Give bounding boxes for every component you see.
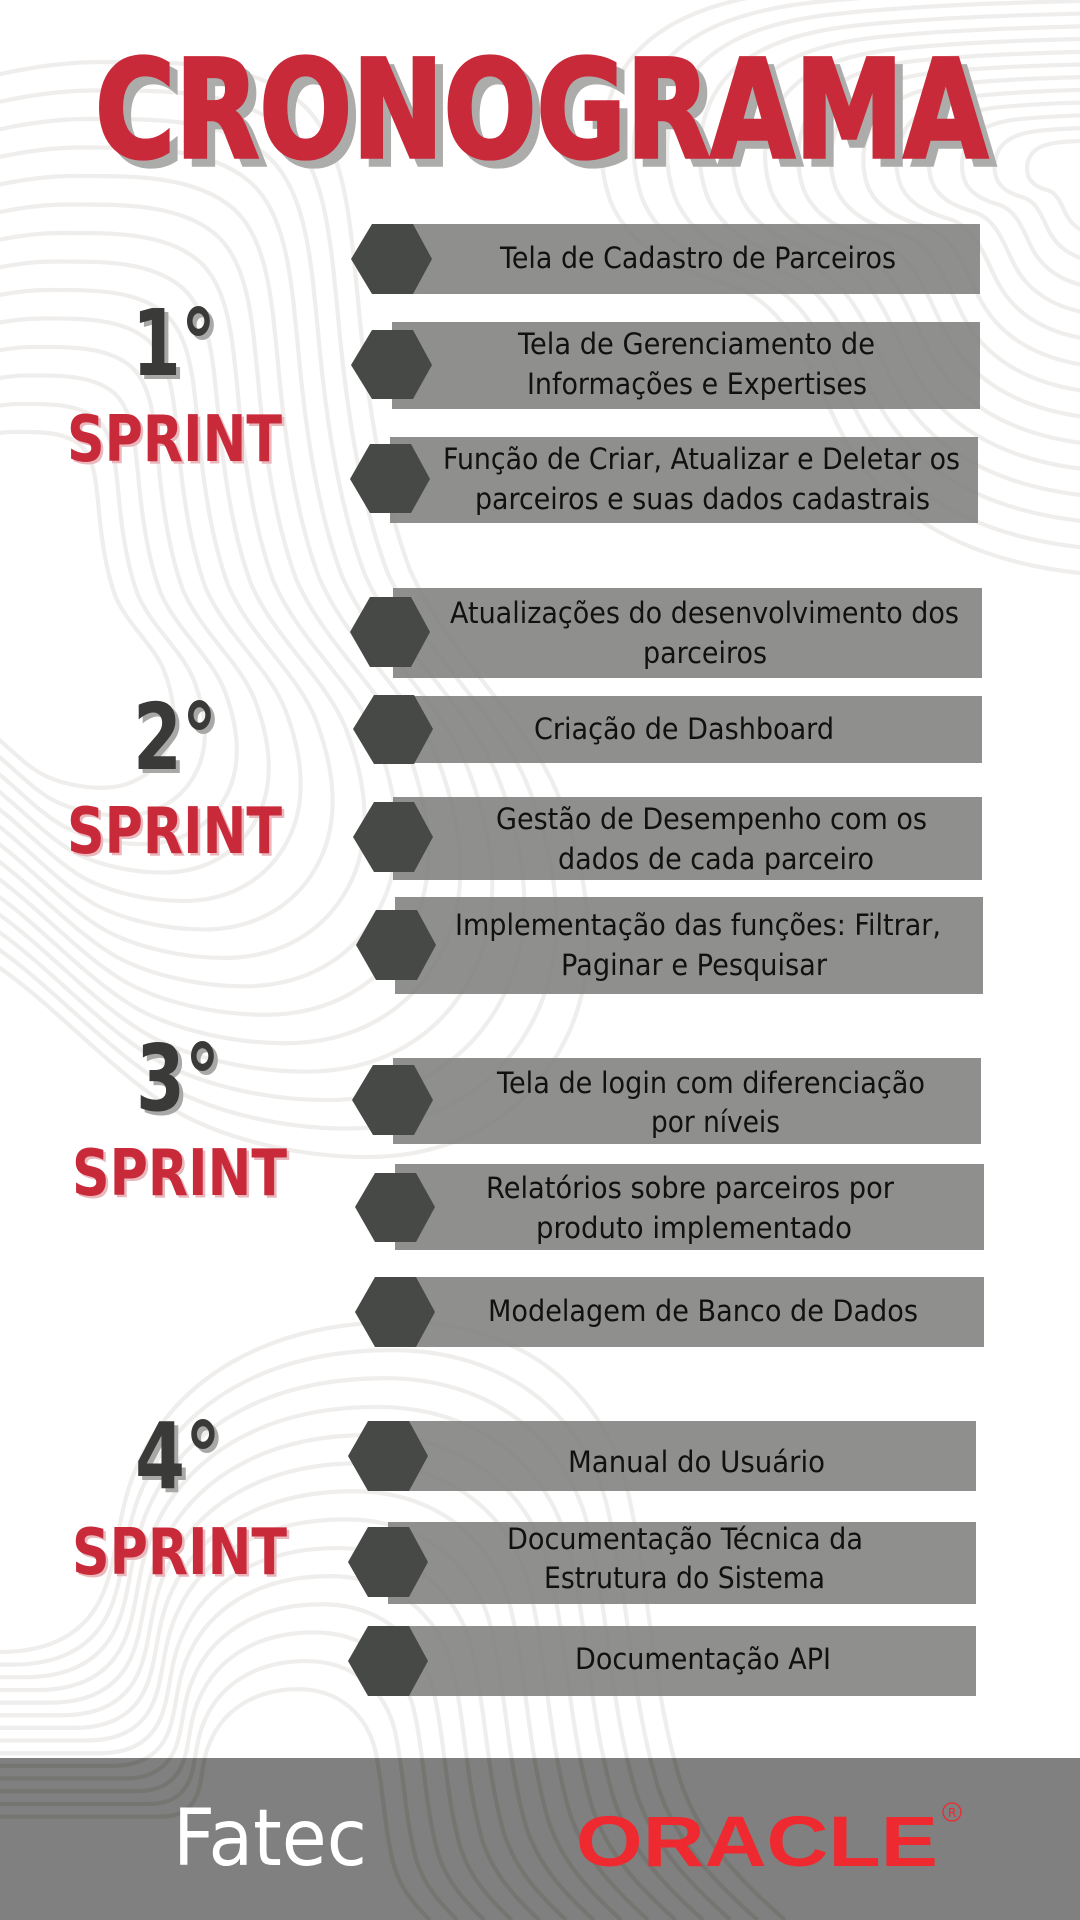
task: Tela de Cadastro de Parceiros <box>351 224 980 294</box>
sprint 4 label: 4° <box>139 1407 225 1514</box>
task: Implementação das funções: Implementação das funções: Filtrar, <box>455 908 941 942</box>
sprint 3 label: SPRINT <box>72 1137 287 1211</box>
sprint 3 label: 3° <box>140 1029 224 1136</box>
task: Função de Criar: parceiros e suas dados cadastrais <box>475 482 930 516</box>
task: Modelagem de Banco de Dados <box>355 1277 984 1347</box>
logo: Oracle: ORACLE <box>576 1803 938 1882</box>
task: Relatórios sobre parceiros: Relatórios sobre parceiros por <box>486 1171 894 1205</box>
task: Atualizações do desenvolvimento <box>350 588 982 678</box>
sprint 4 label: SPRINT <box>72 1516 287 1590</box>
task: Tela de login: por níveis <box>651 1105 780 1139</box>
task: Manual do Usuário <box>348 1421 976 1491</box>
sprint 3 label <box>72 1025 290 1214</box>
task: Tela de login <box>352 1058 981 1144</box>
sprint 1 label: SPRINT <box>70 406 285 480</box>
task: Tela de login: Tela de login com diferenciação <box>496 1066 925 1100</box>
task: Tela de Gerenciamento: Tela de Gerenciamento de <box>517 327 875 361</box>
task: Criação de Dashboard <box>353 695 982 764</box>
sprint 4 label: 4° <box>135 1403 221 1510</box>
sprint 2 label <box>67 684 285 872</box>
sprint 2 label: 2° <box>137 688 221 795</box>
task: Atualizações do desenvolvimento: parceiros <box>643 636 767 670</box>
sprint 3 label: 3° <box>136 1025 220 1132</box>
task: Manual do Usuário: Manual do Usuário <box>568 1445 825 1479</box>
sprint 3 label: SPRINT <box>74 1140 290 1214</box>
sprint 2 label: 2° <box>133 684 217 791</box>
sprint 4 label <box>72 1403 290 1592</box>
footer text: Fatec: Fatec <box>173 1794 367 1884</box>
sprint 4 label: SPRINT <box>74 1518 290 1592</box>
task: Documentação API: Documentação API <box>575 1642 831 1676</box>
task: Tela de Cadastro de Parceiros: Tela de Cadastro de Parceiros <box>499 241 896 275</box>
task: Função de Criar <box>350 437 978 523</box>
task: Implementação das funções: Paginar e Pesquisar <box>561 948 827 982</box>
task: Modelagem de Banco de Dados: Modelagem de Banco de Dados <box>488 1294 918 1328</box>
task: Gestão de Desempenho: Gestão de Desempenho com os <box>496 802 927 836</box>
task: Criação de Dashboard: Criação de Dashboard <box>534 712 834 746</box>
task: Tela de Gerenciamento <box>351 322 980 409</box>
task: Tela de Gerenciamento: Informações e Expertises <box>527 367 867 401</box>
task: Atualizações do desenvolvimento: Atualizações do desenvolvimento dos <box>450 596 959 630</box>
task: Função de Criar: Função de Criar, Atualizar e Deletar os <box>443 442 960 476</box>
sprint 1 label: 1° <box>136 294 220 401</box>
task: Documentação API <box>348 1626 976 1696</box>
sprint 2 label: SPRINT <box>70 798 285 872</box>
logo: Oracle: R <box>948 1806 956 1820</box>
sprint 2 label: SPRINT <box>67 795 282 869</box>
task: Implementação das funções <box>356 897 983 994</box>
footer band <box>0 1758 1080 1920</box>
sprint 1 label: 1° <box>132 290 216 397</box>
task: Documentação Técnica <box>348 1522 976 1604</box>
task: Documentação Técnica: Estrutura do Sistema <box>544 1561 825 1595</box>
task: Relatórios sobre parceiros <box>355 1164 984 1250</box>
task: Gestão de Desempenho: dados de cada parceiro <box>558 842 874 876</box>
sprint 1 label: SPRINT <box>67 403 282 477</box>
task: Gestão de Desempenho <box>353 797 982 880</box>
task: Relatórios sobre parceiros: produto implementado <box>536 1211 852 1245</box>
task: Documentação Técnica: Documentação Técnica da <box>507 1522 863 1556</box>
sprint 1 label <box>67 290 285 480</box>
